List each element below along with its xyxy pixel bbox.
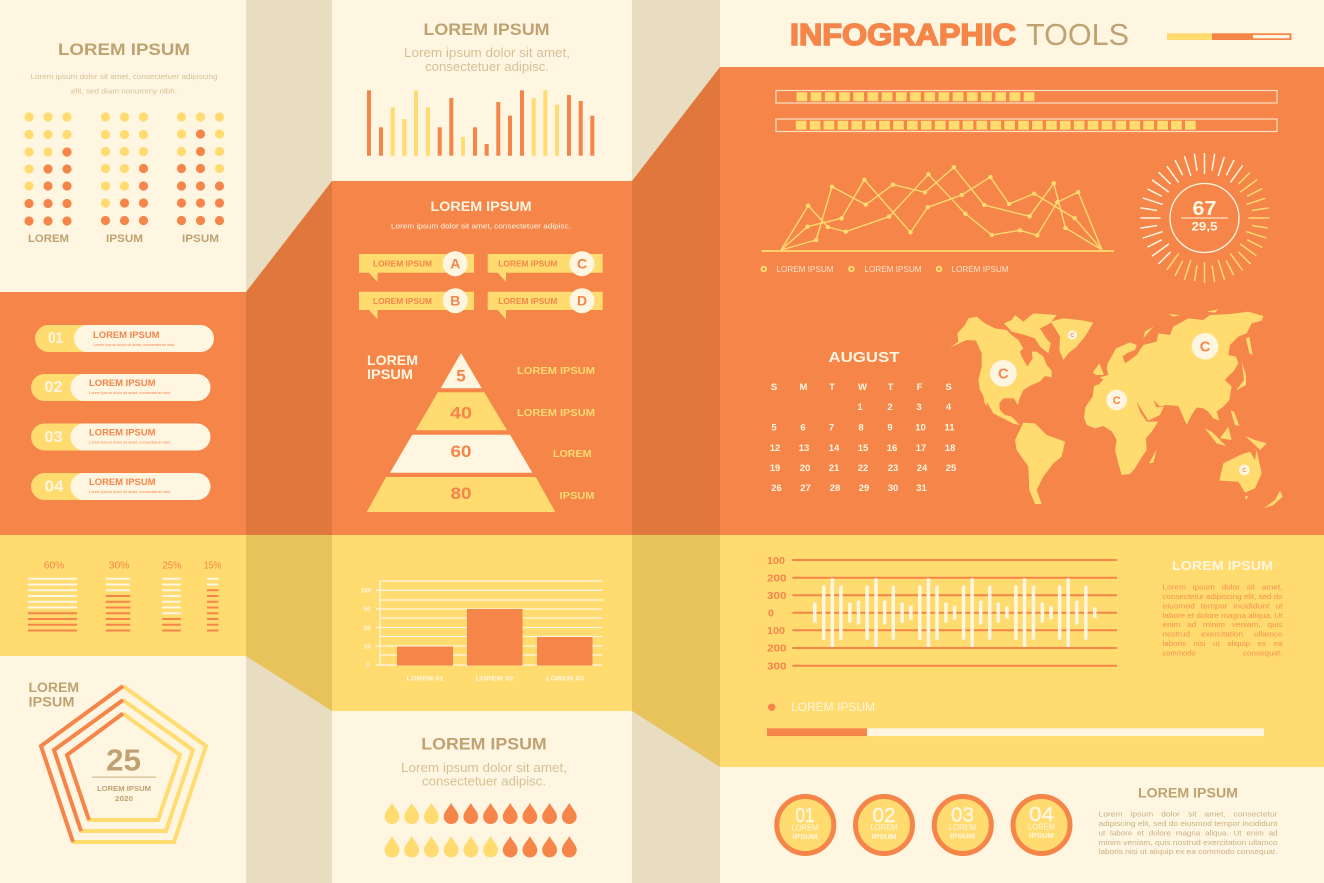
badge 02: IPSUM xyxy=(872,832,896,841)
tag A xyxy=(359,251,474,282)
badge 04: 04 xyxy=(1029,804,1054,826)
heading: pentagon xyxy=(28,680,79,710)
paragraph: waveform xyxy=(1162,582,1284,658)
description: droplets: Lorem ipsum dolor sit amet, xyxy=(401,760,567,775)
panel: numbered list xyxy=(0,292,246,535)
dot grid: ipsum 1 xyxy=(101,112,148,225)
striped bar 60% xyxy=(28,578,77,635)
paragraph: numbered circles xyxy=(1098,810,1279,856)
calendar: T xyxy=(888,382,894,393)
heading: numbered circles: LOREM IPSUM xyxy=(1138,786,1238,800)
badge 03: IPSUM xyxy=(950,832,975,840)
list item 01: 01 xyxy=(48,330,63,347)
dot grid: lorem xyxy=(24,112,72,226)
chart grid and axis xyxy=(376,581,602,666)
tag C: LOREM IPSUM xyxy=(498,260,558,269)
badge 02: 02 xyxy=(872,805,896,827)
y axis labels: 100 xyxy=(361,588,372,594)
waveform axis labels: 200 xyxy=(767,642,787,654)
map marker: africa xyxy=(1106,390,1127,410)
pyramid labels: LOREM IPSUM xyxy=(517,366,595,377)
x axis labels: LOREM 01 xyxy=(406,676,444,682)
calendar: 3 xyxy=(916,402,922,413)
waveform axis labels xyxy=(767,555,787,672)
tag D xyxy=(488,288,603,319)
waveform axis labels: 300 xyxy=(767,660,787,672)
thin column chart xyxy=(367,90,594,156)
paragraph: waveform: consectetur adipiscing elit, sed do xyxy=(1162,592,1282,601)
calendar: W xyxy=(858,382,867,393)
calendar: 29 xyxy=(859,483,869,494)
calendar: 6 xyxy=(800,422,806,434)
map marker: greenland: C xyxy=(1070,333,1074,339)
waveform grid lines xyxy=(792,560,1117,666)
paragraph: waveform: enim ad minim veniam, quis xyxy=(1162,620,1283,629)
calendar: 8 xyxy=(858,422,864,434)
description: column chart: Lorem ipsum dolor sit amet, xyxy=(404,45,570,60)
calendar: 25 xyxy=(946,463,957,474)
heading: pyramid xyxy=(367,353,418,382)
panel: tags and pyramid xyxy=(332,181,632,535)
calendar: 12 xyxy=(770,443,780,454)
list item 04 xyxy=(31,473,210,500)
list item 03: LOREM IPSUM xyxy=(89,428,156,438)
calendar xyxy=(770,349,957,494)
percentage labels: 60% xyxy=(44,560,64,572)
calendar: 14 xyxy=(829,443,840,454)
description: dot matrix: Lorem ipsum dolor sit amet, consectetuer adipiscing xyxy=(30,72,218,81)
badge 01 xyxy=(777,796,834,854)
title: TOOLS xyxy=(1026,17,1129,52)
calendar: 23 xyxy=(888,463,898,474)
heading: tags: LOREM IPSUM xyxy=(430,198,532,214)
y axis labels: 15 xyxy=(363,644,371,650)
waveform axis labels: 0 xyxy=(768,608,774,620)
panel: top column chart xyxy=(332,0,632,181)
calendar: 20 xyxy=(800,463,810,474)
list item 02: LOREM IPSUM xyxy=(89,378,156,388)
pyramid xyxy=(367,353,555,512)
panel: bar chart xyxy=(332,535,632,711)
calendar: S xyxy=(945,382,952,393)
dot grid labels: IPSUM xyxy=(106,233,143,245)
tag B: LOREM IPSUM xyxy=(373,297,432,306)
calendar: 22 xyxy=(858,463,868,474)
radial gauge: 29,5 xyxy=(1192,222,1218,234)
paragraph: numbered circles: Lorem ipsum dolor sit amet, consectetur xyxy=(1098,810,1278,818)
calendar: 27 xyxy=(800,483,811,494)
panel: dashboard xyxy=(720,67,1324,535)
list item 04: 04 xyxy=(44,478,64,496)
dot grid labels xyxy=(28,233,219,245)
description: tags: Lorem ipsum dolor sit amet, consectetuer adipisc. xyxy=(391,222,571,230)
pentagon value: 25 xyxy=(106,742,141,778)
map marker: north america xyxy=(990,360,1017,387)
map marker: asia: C xyxy=(1200,339,1211,355)
calendar: 21 xyxy=(829,463,840,474)
waveform bars xyxy=(815,578,1095,647)
panel: striped percentage bars xyxy=(0,535,246,656)
calendar: 5 xyxy=(771,422,777,434)
y axis labels xyxy=(361,588,372,669)
pentagon value: 2020 xyxy=(115,794,133,803)
tag C xyxy=(488,251,603,282)
map marker: north america: C xyxy=(998,366,1009,382)
list item 01 xyxy=(35,325,214,352)
badge 03: 03 xyxy=(951,804,974,826)
fold strip: right xyxy=(632,0,720,883)
calendar: 10 xyxy=(915,422,926,434)
list item 02: 02 xyxy=(44,379,63,396)
description: column chart: consectetuer adipisc. xyxy=(425,59,549,74)
tag A: LOREM IPSUM xyxy=(373,260,432,269)
fold strip: left xyxy=(246,0,332,883)
tag D: D xyxy=(577,293,587,309)
map marker: asia xyxy=(1192,333,1218,360)
badge 01: LOREM xyxy=(792,824,819,832)
radial gauge xyxy=(1140,153,1270,283)
percentage labels: 25% xyxy=(162,560,182,572)
x axis labels xyxy=(406,676,584,682)
x axis labels: LOREM 02 xyxy=(476,676,514,682)
list item 02 xyxy=(31,374,210,401)
badge 04: LOREM xyxy=(1028,822,1055,832)
list item 01: Lorem ipsum dolor sit amet, consectetuer wisi. xyxy=(93,342,175,347)
paragraph: waveform: Lorem ipsum dolor sit amet, xyxy=(1162,582,1282,592)
striped bar 25% xyxy=(162,578,181,635)
list item 03: Lorem ipsum dolor sit amet, consectetuer wisi. xyxy=(89,440,171,444)
striped bar 30% xyxy=(106,578,130,635)
dot grid labels: LOREM xyxy=(28,233,69,245)
progress bar: waveform xyxy=(767,728,1264,736)
calendar: 15 xyxy=(858,443,869,454)
badge 02 xyxy=(856,796,912,854)
dot grid: ipsum 2 xyxy=(177,112,224,225)
heading: pyramid: LOREM xyxy=(367,353,418,368)
progress bar 1 xyxy=(776,90,1277,103)
paragraph: waveform: nostrud exercitation ullamco xyxy=(1162,630,1282,638)
pyramid: 40 xyxy=(450,404,472,422)
heading: pyramid: IPSUM xyxy=(367,367,413,382)
panel: numbered circles xyxy=(720,767,1324,883)
y axis labels: 50 xyxy=(363,606,371,613)
droplet row 2 xyxy=(385,836,577,857)
calendar: T xyxy=(829,382,835,393)
calendar: S xyxy=(771,382,777,393)
panel: waveform xyxy=(720,535,1324,767)
pyramid: 5 xyxy=(456,366,466,386)
list item 02: Lorem ipsum dolor sit amet, consectetuer wisi. xyxy=(89,390,171,395)
pyramid labels: LOREM xyxy=(553,449,592,460)
calendar: 19 xyxy=(770,463,780,474)
title accent bar xyxy=(1167,33,1292,40)
heading: droplets: LOREM IPSUM xyxy=(421,734,547,754)
paragraph: numbered circles: laboris nisi ut aliquip ex ea commodo consequat. xyxy=(1098,847,1278,856)
calendar: 17 xyxy=(916,443,926,454)
tag C: C xyxy=(577,256,587,272)
list item 03: 03 xyxy=(44,429,63,446)
y axis labels: 0 xyxy=(366,662,370,669)
calendar: F xyxy=(917,382,923,393)
list item 04: LOREM IPSUM xyxy=(89,477,156,487)
list item 03 xyxy=(31,424,210,450)
calendar: 2 xyxy=(887,402,893,413)
calendar: 1 xyxy=(857,402,863,413)
striped bar 15% xyxy=(207,578,218,635)
radial gauge: 67 xyxy=(1192,198,1216,220)
pyramid labels xyxy=(517,366,595,502)
line chart legend: LOREM IPSUM xyxy=(864,265,922,274)
paragraph: waveform: consequat. xyxy=(1243,648,1282,658)
pentagon value xyxy=(92,742,156,803)
chart bars xyxy=(397,609,592,666)
pyramid: 60 xyxy=(450,442,472,461)
badge 03 xyxy=(934,796,991,854)
calendar: 30 xyxy=(888,483,898,494)
panel: droplets xyxy=(332,711,632,883)
paragraph: numbered circles: minim veniam, quis nostrud exercitation ullamco xyxy=(1098,838,1278,847)
panel: pentagon xyxy=(0,656,246,883)
title xyxy=(790,17,1129,52)
paragraph: waveform: commodo xyxy=(1162,648,1196,658)
calendar: 18 xyxy=(945,443,955,454)
paragraph: waveform: laboris nisi ut aliquip ex ea xyxy=(1162,639,1283,648)
line chart legend: LOREM IPSUM xyxy=(776,265,834,274)
map marker: greenland xyxy=(1068,330,1077,340)
calendar: 9 xyxy=(887,422,893,434)
line chart legend xyxy=(762,265,1009,274)
calendar: M xyxy=(800,382,808,393)
map marker: australia: C xyxy=(1242,468,1246,474)
paragraph: numbered circles: ut labore et dolore magna aliqua. Ut enim ad xyxy=(1098,828,1278,838)
progress bar 2 xyxy=(776,119,1277,132)
map marker: africa: C xyxy=(1113,395,1121,407)
calendar: 7 xyxy=(829,422,834,434)
description: dot matrix xyxy=(30,72,218,96)
badge 04 xyxy=(1013,796,1070,854)
badge 01: 01 xyxy=(796,805,814,827)
paragraph: waveform: eiusmod tempor incididunt ut xyxy=(1162,602,1284,610)
calendar: 11 xyxy=(944,422,955,434)
calendar: 4 xyxy=(946,402,952,413)
calendar: 26 xyxy=(771,483,782,494)
pyramid labels: LOREM IPSUM xyxy=(517,408,595,419)
panel: dot matrix xyxy=(0,0,246,292)
dot grid labels: IPSUM xyxy=(182,233,219,245)
concentric pentagons xyxy=(41,686,206,842)
tag A: A xyxy=(450,256,460,272)
waveform axis labels: 200 xyxy=(767,572,787,584)
percentage labels: 15% xyxy=(204,560,221,572)
percentage labels: 30% xyxy=(109,560,129,572)
waveform axis labels: 100 xyxy=(767,625,785,637)
legend: waveform: LOREM IPSUM xyxy=(791,700,875,714)
list item 04: Lorem ipsum dolor sit amet, consectetuer wisi. xyxy=(89,489,171,494)
list item 01: LOREM IPSUM xyxy=(93,330,160,340)
heading: column chart: LOREM IPSUM xyxy=(424,20,550,39)
pentagon value: LOREM IPSUM xyxy=(97,784,151,793)
badge 02: LOREM xyxy=(870,823,898,832)
x axis labels: LOREM 03 xyxy=(546,676,584,682)
world map xyxy=(950,309,1283,508)
description: dot matrix: elit, sed diam nonummy nibh. xyxy=(71,86,177,96)
calendar: 31 xyxy=(916,483,927,494)
badge 01: IPSUM xyxy=(792,832,818,841)
tag D: LOREM IPSUM xyxy=(498,297,558,306)
paragraph: waveform: labore et dolore magna aliqua. Ut xyxy=(1162,611,1283,620)
badge 03: LOREM xyxy=(949,823,976,832)
description: droplets xyxy=(401,760,567,788)
tag B xyxy=(359,288,474,319)
description: column chart xyxy=(404,45,570,74)
calendar: AUGUST xyxy=(828,349,900,366)
waveform axis labels: 300 xyxy=(767,590,787,602)
calendar: 28 xyxy=(830,483,840,494)
paragraph: numbered circles: adipiscing elit, sed do eiusmod tempor incididunt xyxy=(1098,819,1279,828)
droplet row 1 xyxy=(385,803,577,824)
title: INFOGRAPHIC xyxy=(790,17,1016,52)
heading: pentagon: IPSUM xyxy=(28,694,74,710)
badge 04: IPSUM xyxy=(1029,831,1054,840)
calendar: 13 xyxy=(799,443,809,454)
waveform axis labels: 100 xyxy=(767,555,785,567)
heading: waveform: LOREM IPSUM xyxy=(1172,558,1273,573)
percentage labels xyxy=(44,560,221,572)
y axis labels: 25 xyxy=(363,625,371,632)
pyramid labels: IPSUM xyxy=(560,491,594,502)
heading: pentagon: LOREM xyxy=(28,680,79,695)
panel: title band xyxy=(720,0,1324,67)
description: droplets: consectetuer adipisc. xyxy=(422,774,546,788)
pyramid: 80 xyxy=(450,484,472,503)
tag B: B xyxy=(450,293,460,309)
map marker: australia xyxy=(1239,465,1250,475)
line chart legend: LOREM IPSUM xyxy=(952,265,1009,274)
calendar: 16 xyxy=(887,443,897,454)
line chart xyxy=(762,165,1114,251)
heading: dot matrix: LOREM IPSUM xyxy=(58,40,190,59)
calendar: 24 xyxy=(917,463,928,474)
